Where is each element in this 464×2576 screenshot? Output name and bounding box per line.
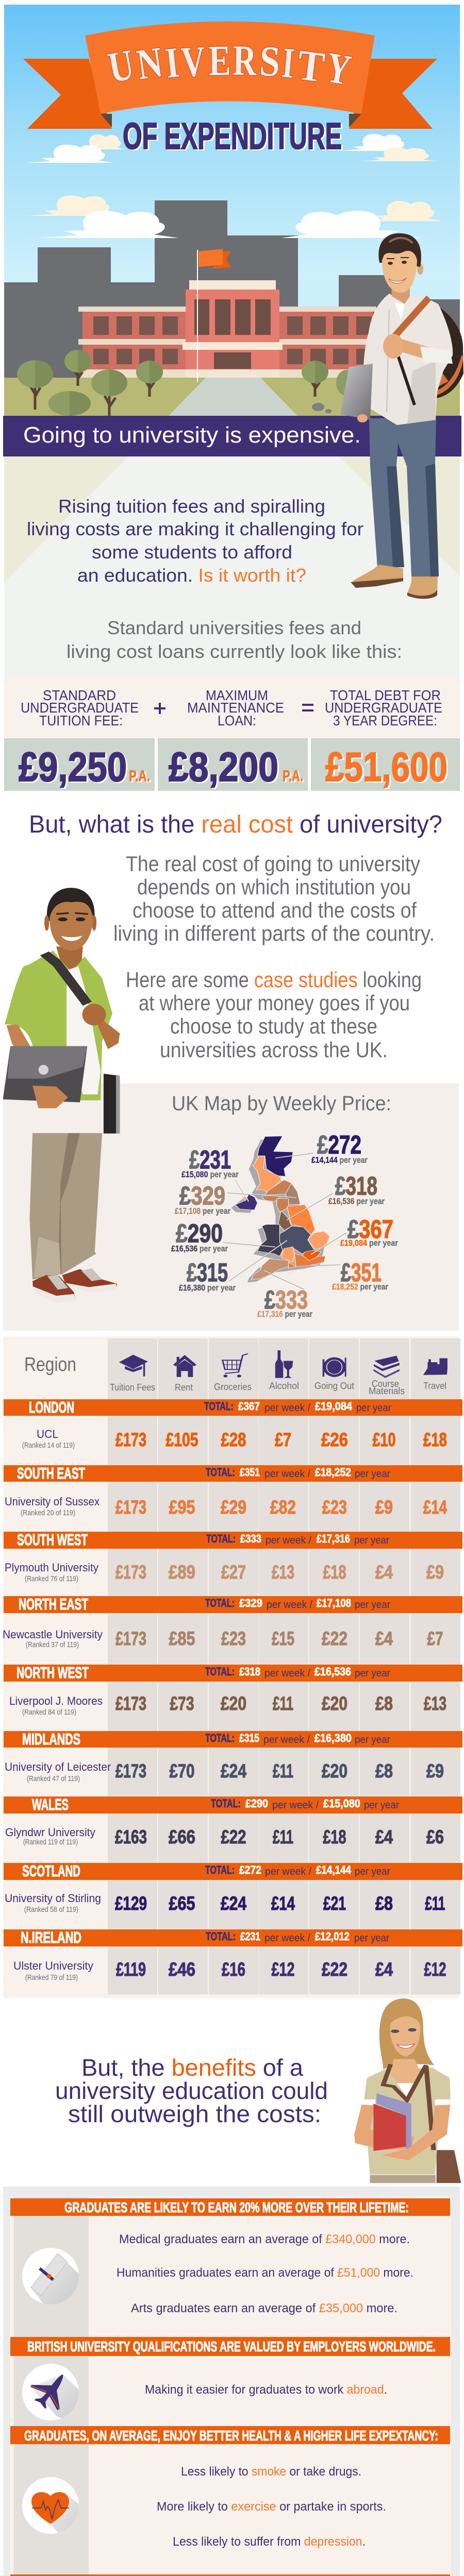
row: Glyndwr University: (Ranked 119 of 119) [23, 1838, 78, 1846]
region band: South East: per year [355, 1468, 390, 1480]
region band: Wales: WALES [32, 1795, 69, 1814]
region band: Northern Ireland: N.IRELAND [21, 1928, 81, 1946]
heading: benefits [55, 2054, 328, 2127]
row: Glyndwr University: Glyndwr University [5, 1826, 95, 1839]
row: Liverpool J. Moores: (Ranked 84 of 119) [22, 1708, 76, 1717]
region band: South West: £17,316 [317, 1532, 350, 1545]
trees [17, 350, 357, 416]
region band: South East: £18,252 [315, 1466, 351, 1479]
region band: North West: TOTAL: [205, 1665, 235, 1678]
text: standard fees intro: living cost loans currently look like this: [67, 641, 402, 662]
region band: London: TOTAL: [204, 1400, 234, 1413]
label: tuition fee: UNDERGRADUATE [21, 700, 139, 716]
row: Ulster University: £4 [375, 1959, 393, 1980]
region band: South West: per year [354, 1535, 389, 1546]
region band: Scotland: TOTAL: [205, 1863, 235, 1876]
region band: South West: per week / [266, 1535, 311, 1546]
row: Liverpool J. Moores: £11 [273, 1693, 293, 1714]
row: University of Stirling: £8 [375, 1893, 393, 1914]
row: Plymouth University: £13 [272, 1562, 294, 1583]
icon: aeroplane [22, 2364, 79, 2420]
table header: region: Region [24, 1354, 76, 1376]
row: Liverpool J. Moores: £8 [375, 1693, 393, 1714]
text: health [157, 2465, 386, 2549]
row: Ulster University: £16 [222, 1959, 245, 1980]
purple strapline band: Going to university is expensive. [23, 422, 361, 448]
text: real cost explanation: depends on which institution you [137, 875, 411, 899]
heading: benefits: university education could [55, 2077, 328, 2104]
row: Liverpool J. Moores [9, 1693, 446, 1717]
chart: UK map of regions [223, 1136, 346, 1290]
map label: South West: £333 [264, 1285, 308, 1314]
map label: Northern Ireland [181, 1145, 239, 1179]
text: rising tuition fees intro: some students to afford [92, 541, 292, 563]
clouds upper [26, 134, 442, 221]
label: total debt: TOTAL DEBT FOR [330, 687, 441, 703]
heading: benefits: But, the benefits of a [81, 2054, 303, 2081]
row: University of Sussex: £14 [423, 1497, 447, 1518]
row: University of Sussex: University of Sussex [5, 1495, 100, 1508]
region band: Wales: per week / [272, 1800, 319, 1811]
row: University of Leicester: £8 [375, 1760, 393, 1782]
row: Glyndwr University: £66 [169, 1826, 195, 1848]
region band: South East: SOUTH EAST [17, 1464, 85, 1482]
region band: Scotland: £272 [239, 1863, 261, 1876]
map label: Midlands [179, 1258, 236, 1293]
map label: London: £19,084 per year [340, 1238, 398, 1248]
text: health: More likely to exercise or partake in sports. [157, 2500, 386, 2514]
row: University of Sussex: £29 [221, 1497, 246, 1518]
icon: stack of books [373, 1355, 400, 1378]
row: UCL: £18 [423, 1429, 447, 1450]
row: UCL: £7 [275, 1429, 291, 1450]
heading: real cost: But, what is the real cost of university? [29, 811, 442, 838]
heading: UK map: UK Map by Weekly Price: [172, 1092, 391, 1115]
figure: male student with backpack [340, 233, 463, 599]
label: maintenance loan: MAINTENANCE [187, 700, 284, 716]
map label: Wales: £16,536 per year [171, 1244, 228, 1253]
text: rising tuition fees intro: an education. Is it worth it? [77, 565, 306, 586]
row: Ulster University: £119 [116, 1959, 146, 1980]
region band: Wales: £290 [245, 1797, 268, 1810]
map label: North West: £318 [335, 1172, 377, 1200]
map label: South West [257, 1285, 312, 1319]
text: case studies: universities across the UK. [160, 1038, 388, 1062]
table header labels: Materials [369, 1386, 405, 1396]
fee box: 8,200: £8,200 [169, 744, 278, 790]
heading: benefits: still outweigh the costs: [68, 2100, 321, 2127]
region band: Wales [4, 1795, 462, 1814]
region band: North West: £16,536 [314, 1665, 351, 1678]
table header labels: Groceries [214, 1382, 252, 1392]
row: University of Sussex: £23 [322, 1497, 347, 1518]
row: Glyndwr University: £11 [273, 1826, 293, 1848]
row: Ulster University: £12 [424, 1959, 446, 1980]
row: Ulster University: (Ranked 79 of 119) [25, 1973, 78, 1982]
row: University of Leicester: (Ranked 47 of 119) [27, 1774, 80, 1783]
row: Plymouth University: (Ranked 76 of 119) [25, 1574, 78, 1583]
region band: Scotland: per week / [265, 1866, 311, 1877]
region band: Midlands: TOTAL: [205, 1732, 235, 1744]
text: rising tuition fees intro [27, 496, 363, 586]
buildings skyline [4, 200, 460, 378]
label: tuition fee: STANDARD [43, 687, 116, 703]
map label: South East [332, 1258, 388, 1292]
icon: plate and cutlery [323, 1357, 346, 1377]
icon: wine bottle and glass [275, 1350, 293, 1378]
table header labels: Alcohol [269, 1381, 299, 1391]
icon: shopping cart [223, 1354, 248, 1377]
label: total debt: UNDERGRADUATE [325, 700, 442, 716]
row: Liverpool J. Moores: £20 [221, 1693, 246, 1714]
row: University of Stirling: £14 [271, 1893, 295, 1914]
row: University of Leicester: University of Leicester [5, 1760, 111, 1773]
region band: Northern Ireland: per year [354, 1933, 389, 1944]
row: Glyndwr University [5, 1826, 444, 1848]
region band: Northern Ireland [4, 1928, 462, 1946]
row: UCL [22, 1428, 447, 1450]
region band: North East: £17,108 [317, 1597, 351, 1609]
map label: Scotland: £272 [317, 1130, 361, 1159]
region band: Wales: per year [364, 1800, 399, 1811]
region band: North West: per week / [264, 1668, 310, 1679]
row: Liverpool J. Moores: £20 [322, 1693, 347, 1714]
row: Liverpool J. Moores: £73 [170, 1693, 194, 1714]
icon: heartbeat [22, 2477, 79, 2534]
row: University of Stirling: (Ranked 58 of 119) [24, 1905, 78, 1914]
icon: diploma [22, 2248, 79, 2304]
row: Plymouth University: £89 [169, 1562, 195, 1583]
row: Ulster University: £22 [322, 1959, 347, 1980]
region band: Scotland [4, 1862, 462, 1880]
icon: plus [154, 703, 165, 714]
region band: North East: per week / [267, 1599, 312, 1611]
map label: South East: £18,252 per year [332, 1282, 388, 1292]
region band: Midlands: £16,380 [314, 1732, 352, 1744]
row: University of Stirling: £11 [425, 1893, 445, 1914]
table header icons [119, 1350, 448, 1378]
title: University: Y [323, 43, 354, 95]
row: University of Leicester: £24 [221, 1760, 246, 1782]
region band: Midlands: MIDLANDS [22, 1730, 80, 1748]
title: University: V [180, 38, 206, 87]
region band: North West [4, 1664, 462, 1682]
label: maintenance loan: MAXIMUM [206, 687, 268, 703]
row: Plymouth University [5, 1561, 444, 1583]
region band: Scotland: SCOTLAND [22, 1862, 80, 1880]
title: University: N [134, 38, 165, 89]
row: University of Leicester: £70 [169, 1760, 195, 1782]
label: tuition fee: TUITION FEE: [39, 713, 123, 728]
row: Glyndwr University: £6 [426, 1826, 444, 1848]
row: University of Leicester: £173 [115, 1760, 146, 1782]
region band: North West: per year [355, 1668, 390, 1679]
row: Newcastle University: £15 [272, 1628, 294, 1649]
table header labels: Travel [423, 1381, 446, 1391]
text: earnings figures: Medical graduates earn an average of £340,000 more. [119, 2232, 410, 2246]
region band: North East: TOTAL: [205, 1597, 235, 1609]
label: maintenance loan: LOAN: [218, 713, 256, 728]
map label: Northern Ireland: £15,080 per year [181, 1170, 239, 1179]
title: University: S [258, 37, 281, 86]
map label: North West [328, 1172, 385, 1206]
map label: Midlands: £315 [187, 1258, 228, 1287]
fee box: 8,200: P.A. [283, 768, 303, 785]
map label: North East: £329 [179, 1181, 225, 1210]
panel: fee equation [4, 676, 460, 738]
purple strapline band [3, 416, 461, 456]
row: University of Sussex: £9 [375, 1497, 393, 1518]
fee box: 9,250: £9,250 [19, 744, 127, 790]
region band: South East [4, 1464, 462, 1482]
row: UCL: £28 [221, 1429, 246, 1450]
row: Newcastle University: £7 [427, 1628, 443, 1649]
text: case studies: Here are some case studies looking [126, 968, 422, 992]
row: University of Sussex: £82 [270, 1497, 296, 1518]
text: work abroad: Making it easier for graduates to work abroad. [145, 2383, 387, 2397]
row: Newcastle University: £22 [322, 1628, 347, 1649]
text: case studies: choose to study at these [170, 1014, 377, 1038]
title: University: E [208, 37, 231, 85]
row: University of Leicester: £20 [322, 1760, 347, 1782]
text: real cost explanation: choose to attend and the costs of [132, 898, 417, 922]
row: University of Leicester: £9 [426, 1760, 444, 1782]
region band: Wales: £15,080 [323, 1797, 360, 1810]
row: Plymouth University: £27 [221, 1562, 246, 1583]
region band: Midlands: per year [355, 1734, 390, 1745]
row: Liverpool J. Moores: Liverpool J. Moores [9, 1694, 103, 1707]
region band: London: £19,084 [315, 1400, 353, 1413]
row: Ulster University: Ulster University [13, 1959, 93, 1972]
benefit band: influence [10, 2574, 450, 2576]
region band: South East: £351 [240, 1466, 260, 1479]
region band: North East: £329 [239, 1597, 262, 1609]
row: University of Sussex: (Ranked 20 of 119) [21, 1509, 75, 1517]
row: UCL: £173 [115, 1429, 146, 1450]
region band: Midlands [4, 1730, 462, 1748]
table header labels [110, 1379, 446, 1396]
region band: London: LONDON [29, 1398, 74, 1416]
row: Ulster University [13, 1959, 446, 1982]
region band: North East: per year [355, 1599, 390, 1611]
figure: female student with books [354, 1998, 461, 2183]
row: Plymouth University: £173 [115, 1562, 146, 1583]
row: Ulster University: £46 [169, 1959, 195, 1980]
row: Newcastle University: £173 [115, 1628, 146, 1649]
row: University of Leicester [5, 1760, 444, 1783]
row: UCL: (Ranked 14 of 119) [22, 1441, 75, 1450]
title: University: I [280, 39, 296, 88]
text: rising tuition fees intro: Rising tuition fees and spiralling [58, 496, 325, 517]
icon: equals [302, 705, 313, 710]
text: real cost explanation: The real cost of going to university [126, 852, 420, 876]
table header labels: Course [372, 1379, 399, 1389]
map label: Scotland: £14,144 per year [311, 1155, 368, 1165]
map label: Wales: £290 [176, 1219, 223, 1248]
region band: North West: NORTH WEST [16, 1664, 89, 1682]
row: University of Stirling: £21 [323, 1893, 346, 1914]
row: UCL: £26 [321, 1429, 348, 1450]
flag on pole [197, 249, 231, 382]
text: case studies: at where your money goes if you [139, 991, 410, 1015]
text: earnings figures: Arts graduates earn an average of £35,000 more. [131, 2301, 397, 2315]
map label: South West: £17,316 per year [257, 1309, 312, 1319]
row: University of Stirling: £65 [169, 1893, 195, 1914]
label: total debt [325, 687, 442, 728]
row: University of Stirling: £129 [115, 1893, 147, 1914]
row: University of Sussex: £173 [115, 1497, 146, 1518]
row: Plymouth University: £4 [375, 1562, 393, 1583]
region band: South West [4, 1531, 462, 1549]
title: University [105, 37, 354, 95]
row: University of Stirling: University of Stirling [5, 1892, 101, 1905]
row: Newcastle University: Newcastle University [3, 1628, 103, 1641]
region band: North East [4, 1595, 462, 1613]
row: UCL: £105 [166, 1429, 198, 1450]
icon: steam train [423, 1358, 448, 1375]
panel: UK map background [3, 1083, 459, 1331]
title: of expenditure: OF EXPENDITURE [123, 116, 342, 157]
row: Liverpool J. Moores: £13 [424, 1693, 446, 1714]
row: Ulster University: £12 [271, 1959, 295, 1980]
background below hero [4, 456, 460, 676]
map label: South East: £351 [341, 1258, 382, 1287]
text: standard fees intro: Standard universities fees and [107, 617, 361, 638]
map label: North West: £16,536 per year [328, 1196, 385, 1206]
table header labels: Tuition Fees [110, 1382, 155, 1393]
region band: Northern Ireland: TOTAL: [206, 1930, 236, 1943]
map label: North East: £17,108 per year [175, 1206, 230, 1216]
map label: Midlands: £16,380 per year [179, 1283, 236, 1293]
row: Plymouth University: Plymouth University [5, 1561, 98, 1574]
row: Newcastle University: £85 [169, 1628, 195, 1649]
clouds lower [39, 211, 426, 238]
region band: London [4, 1398, 462, 1416]
row: Glyndwr University: £18 [323, 1826, 346, 1848]
region band: Midlands: £315 [239, 1732, 259, 1744]
row: Plymouth University: £18 [323, 1562, 346, 1583]
row: University of Sussex [5, 1495, 447, 1518]
map label: London: £367 [347, 1215, 393, 1244]
title: University: T [295, 41, 327, 92]
text: real cost explanation [113, 852, 435, 945]
row: Newcastle University: (Ranked 37 of 119) [26, 1640, 79, 1649]
text: case studies [126, 968, 422, 1062]
icon: graduation cap [119, 1354, 148, 1377]
row: University of Stirling: £24 [221, 1893, 246, 1914]
label: tuition fee [21, 687, 139, 728]
region band: Scotland: per year [355, 1866, 390, 1877]
table header labels: Rent [175, 1382, 193, 1393]
row: University of Leicester: £11 [273, 1760, 293, 1782]
figure: student with laptop [3, 888, 120, 1302]
region band: South West: SOUTH WEST [17, 1531, 88, 1549]
text: earnings figures [117, 2232, 413, 2315]
text: rising tuition fees intro: living costs are making it challenging for [27, 518, 363, 539]
row: Newcastle University: £4 [375, 1628, 393, 1649]
title: University: U [105, 41, 138, 92]
text: real cost explanation: living in different parts of the country. [113, 921, 435, 945]
row: Liverpool J. Moores: £173 [115, 1693, 146, 1714]
region band: South East: TOTAL: [206, 1466, 235, 1479]
panel: hero campus scene [4, 5, 460, 416]
ribbon banner [23, 22, 437, 129]
region band: Northern Ireland: £231 [240, 1930, 260, 1943]
leader lines [223, 1153, 346, 1290]
row: Glyndwr University: £22 [221, 1826, 246, 1848]
ground and path [4, 378, 460, 416]
text: earnings figures: Humanities graduates earn an average of £51,000 more. [117, 2266, 413, 2280]
region band: London: £367 [238, 1400, 260, 1413]
region band: South West: TOTAL: [206, 1532, 236, 1545]
panel: benefits background [3, 2187, 460, 2576]
title: University: R [233, 37, 257, 85]
region band: London: per year [356, 1402, 391, 1414]
text: health: Less likely to smoke or take drugs. [181, 2465, 361, 2479]
row: UCL: UCL [37, 1428, 58, 1440]
region band: Northern Ireland: per week / [264, 1933, 310, 1944]
region band: North West: £318 [239, 1665, 260, 1678]
region band: South West: £333 [240, 1532, 261, 1545]
table header labels: Going Out [314, 1381, 354, 1391]
row: University of Sussex: £95 [169, 1497, 195, 1518]
region band: Midlands: per week / [263, 1734, 310, 1745]
label: total debt: 3 YEAR DEGREE: [333, 713, 437, 728]
title: University: I [163, 39, 181, 88]
school building [78, 280, 376, 378]
label: maintenance loan [187, 687, 284, 728]
row: University of Stirling [5, 1892, 445, 1914]
panel: cost table background [3, 1336, 460, 1998]
region band: Northern Ireland: £12,012 [315, 1930, 350, 1943]
icon: house [173, 1355, 196, 1377]
region band: London: per week / [264, 1402, 310, 1414]
region band: South East: per week / [264, 1468, 310, 1480]
text: health: Less likely to suffer from depression. [173, 2535, 366, 2549]
row: Newcastle University: £23 [221, 1628, 246, 1649]
text: standard fees intro [67, 617, 402, 662]
row: Plymouth University: £9 [426, 1562, 444, 1583]
row: Glyndwr University: £4 [375, 1826, 393, 1848]
fee box: 9,250: P.A. [129, 768, 150, 785]
region band: North East: NORTH EAST [19, 1595, 88, 1613]
row: Glyndwr University: £163 [115, 1826, 147, 1848]
region band: Wales: TOTAL: [211, 1797, 241, 1810]
row: Newcastle University [3, 1628, 443, 1649]
row: UCL: £10 [372, 1429, 396, 1450]
map label: Northern Ireland: £231 [189, 1145, 231, 1174]
region band: Scotland: £14,144 [316, 1863, 352, 1876]
